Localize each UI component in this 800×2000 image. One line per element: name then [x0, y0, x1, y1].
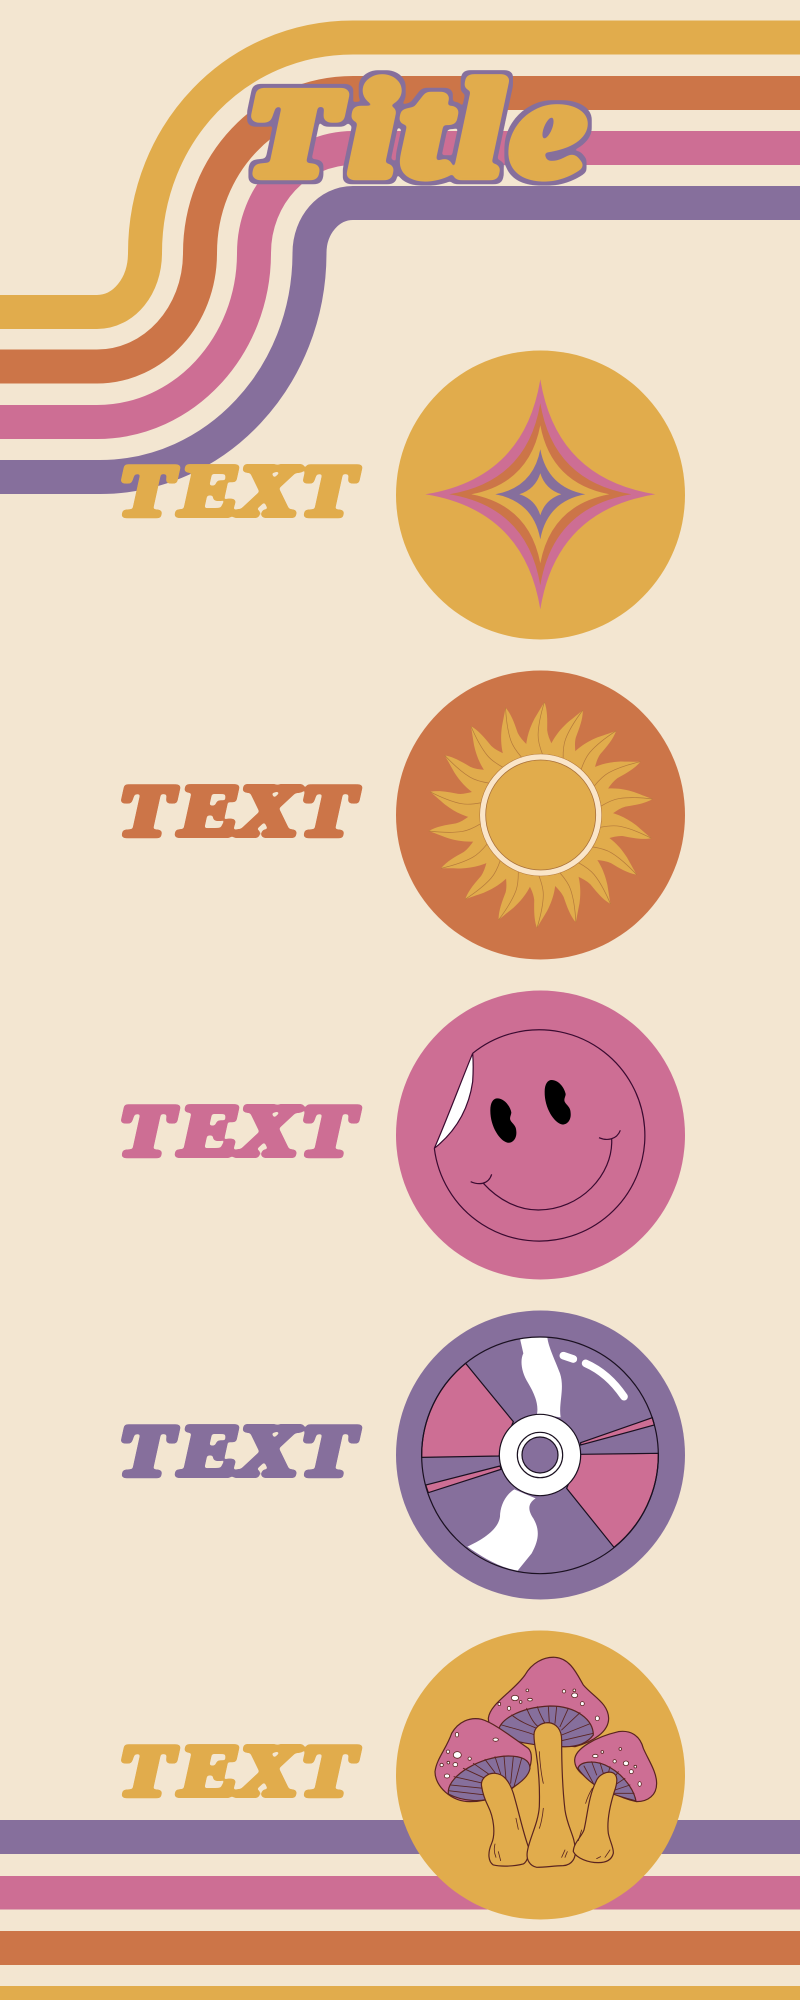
item 4: circle with compact disc	[396, 1310, 685, 1600]
item 3 label: TEXT	[118, 1090, 360, 1171]
center stem	[527, 1723, 575, 1867]
item 2: circle with sun	[396, 670, 685, 960]
icon: compact disc	[422, 1337, 658, 1574]
item 5 label: TEXT	[118, 1730, 360, 1811]
item 3: circle with smiley	[396, 990, 685, 1280]
title: Title	[248, 54, 584, 204]
icon: mushrooms	[435, 1657, 657, 1867]
item 5: circle with mushrooms	[396, 1630, 685, 1920]
item 2 label: TEXT	[118, 770, 360, 851]
mushroom cap spots	[440, 1689, 641, 1786]
top rainbow stripes	[0, 38, 800, 477]
left mushroom	[435, 1719, 531, 1866]
right mushroom	[573, 1731, 657, 1863]
icon: peeling smiley sticker	[434, 1030, 645, 1241]
icon: sun	[426, 702, 655, 928]
icon: four-point star	[425, 379, 655, 609]
item 4 label: TEXT	[118, 1410, 360, 1491]
center mushroom cap	[488, 1657, 609, 1747]
item 1 label: TEXT	[118, 450, 360, 531]
bottom stripes	[0, 1820, 800, 2000]
item 1: circle with star	[396, 350, 685, 640]
